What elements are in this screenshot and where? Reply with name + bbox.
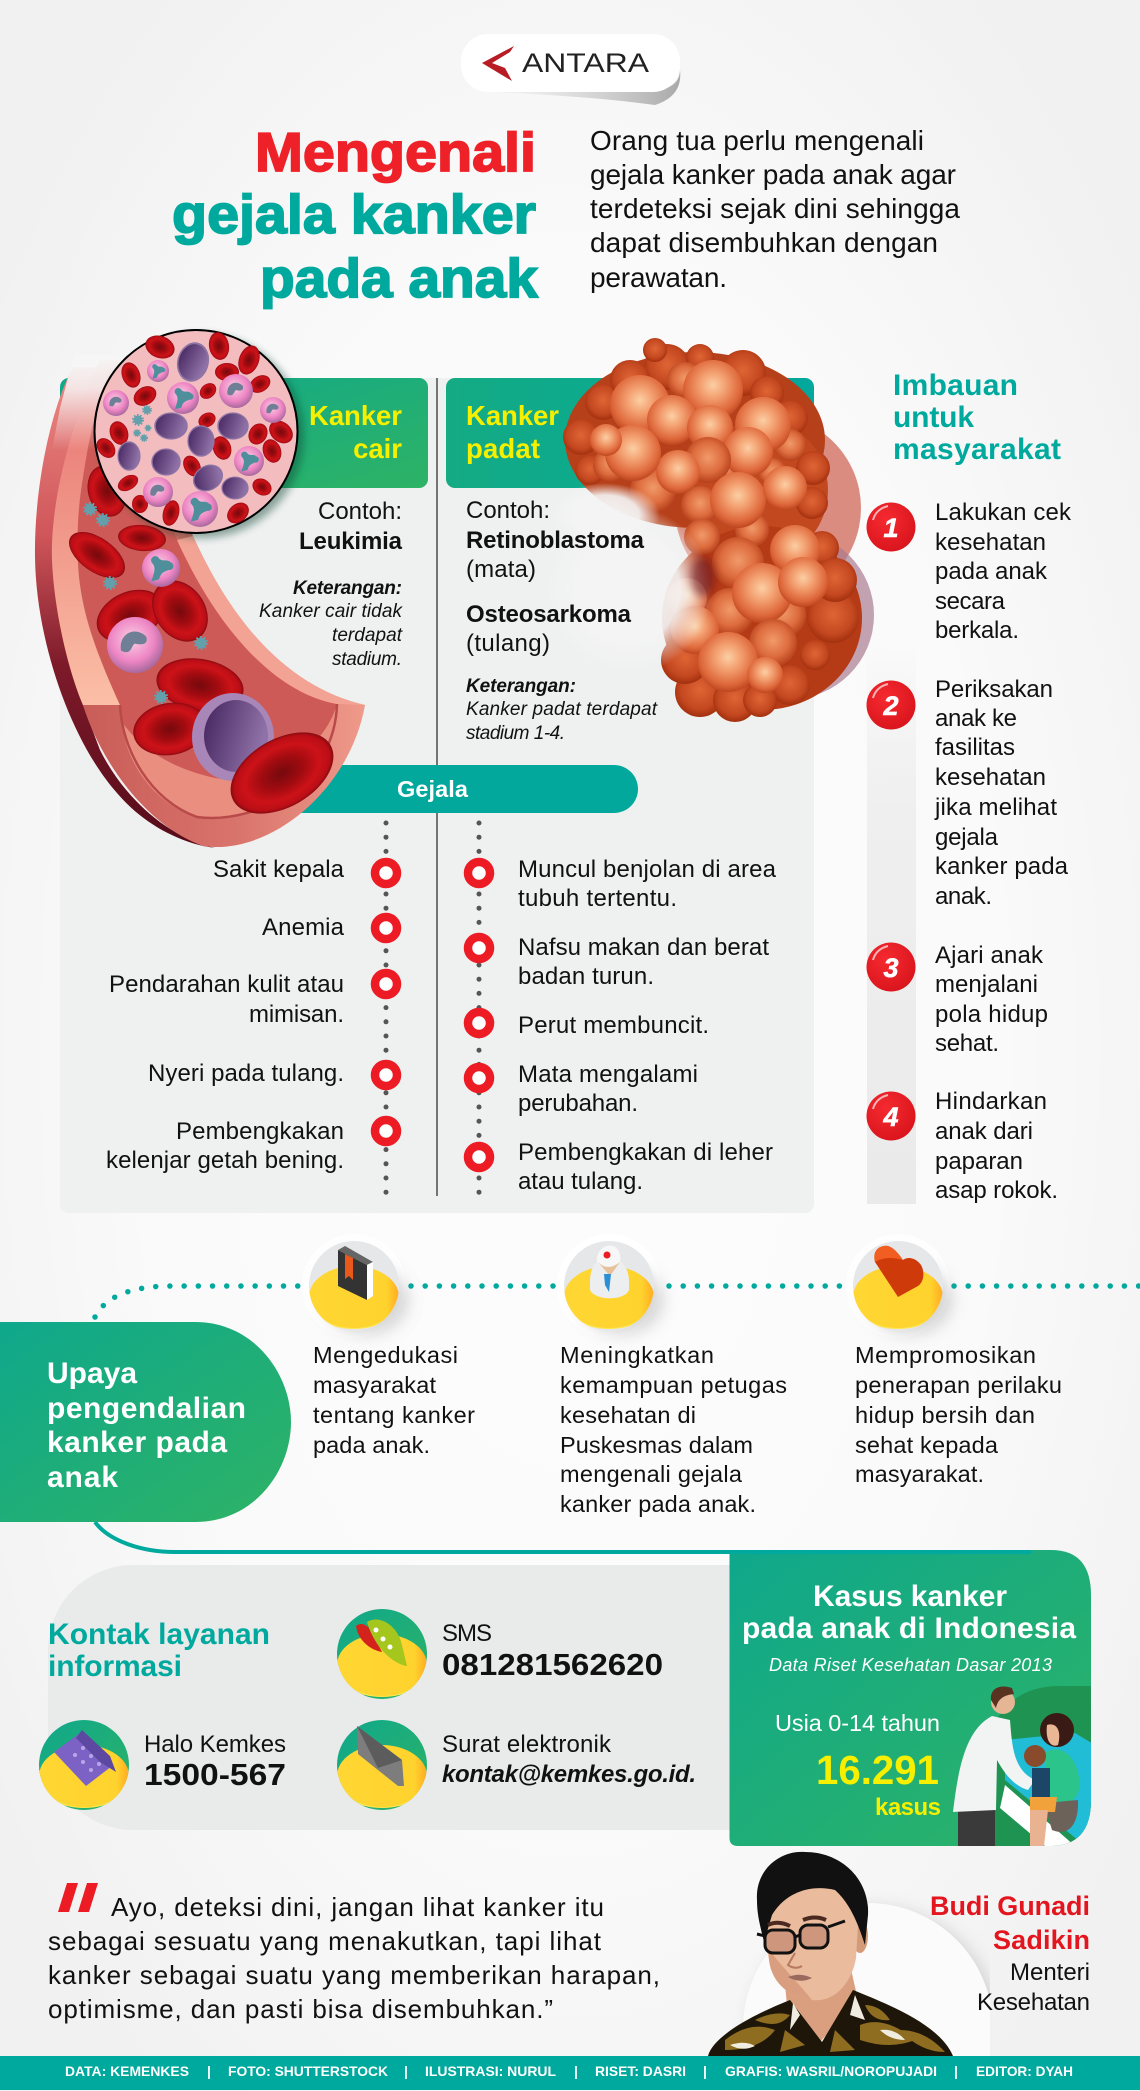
- illustration: blood vessel: [35, 355, 365, 848]
- kanker cair text: [259, 400, 404, 670]
- symptoms: kanker padat: tubuh tertentu.: [518, 885, 677, 912]
- intro text: Orang tua perlu mengenali: [590, 125, 924, 156]
- upaya 2 text: kanker pada anak.: [560, 1491, 756, 1517]
- upaya 2 text: kesehatan di: [560, 1402, 696, 1428]
- contact: halo kemkes: [39, 1720, 286, 1810]
- advice 1: berkala.: [935, 617, 1019, 644]
- upaya 3 text: [855, 1342, 1062, 1487]
- name: Budi Gunadi Sadikin: Sadikin: [993, 1925, 1090, 1955]
- panel: kontak background: [48, 1565, 740, 1830]
- contact: SMS: [337, 1609, 663, 1699]
- symptoms: kanker padat: Perut membuncit.: [518, 1012, 709, 1039]
- intro text: dapat disembuhkan dengan: [590, 227, 938, 258]
- name: Budi Gunadi Sadikin: Budi Gunadi: [930, 1891, 1090, 1921]
- panel: kasus kanker: 16.291: [816, 1747, 939, 1793]
- symptoms: kanker cair: Sakit kepala: [213, 856, 345, 883]
- footer credits: RISET: DASRI: [595, 2063, 686, 2079]
- illustration: doctor examining child: [953, 1686, 1095, 1846]
- kanker cair text: stadium.: [332, 649, 402, 670]
- quote: sebagai sesuatu yang menakutkan, tapi lihat: [48, 1926, 602, 1956]
- panel: kanker comparison background: [60, 378, 814, 1213]
- kanker padat text: Retinoblastoma: [466, 527, 645, 554]
- intro text: gejala kanker pada anak agar: [590, 159, 956, 190]
- advice 2: fasilitas: [935, 734, 1015, 761]
- quote: [48, 1883, 660, 2024]
- advice 2: kesehatan: [935, 764, 1046, 791]
- panel: kasus kanker: pada anak di Indonesia: [742, 1612, 1076, 1645]
- footer credits: |: [404, 2063, 408, 2079]
- advice 1: kesehatan: [935, 529, 1046, 556]
- footer credits: |: [703, 2063, 707, 2079]
- quote: kanker sebagai suatu yang memberikan harapan,: [48, 1960, 660, 1990]
- upaya 1 text: pada anak.: [313, 1432, 430, 1458]
- symptoms: kanker padat: Nafsu makan dan berat: [518, 934, 769, 961]
- heading: imbauan: masyarakat: [893, 433, 1061, 466]
- header: kanker cair background: [60, 378, 428, 488]
- title: gejala kanker: [172, 183, 536, 245]
- upaya 2 text: kemampuan petugas: [560, 1372, 787, 1398]
- panel: upaya pengendalian: anak: [47, 1461, 118, 1494]
- dotted symptom timelines: [386, 823, 479, 1194]
- upaya 3 text: Mempromosikan: [855, 1342, 1036, 1368]
- footer credits: GRAFIS: WASRIL/NOROPUJADI: [725, 2063, 937, 2079]
- advice 3: menjalani: [935, 971, 1038, 998]
- name: Budi Gunadi Sadikin: [930, 1891, 1090, 2016]
- contact: surat elektronik: kontak@kemkes.go.id.: [442, 1761, 696, 1788]
- panel: upaya pengendalian: kanker pada: [47, 1426, 227, 1459]
- advice 2: anak ke: [935, 705, 1017, 732]
- upaya 3 text: hidup bersih dan: [855, 1402, 1035, 1428]
- advice 3: 3: [883, 953, 899, 983]
- footer credits: |: [574, 2063, 578, 2079]
- title: [172, 121, 538, 309]
- connector line: [95, 1522, 1031, 1552]
- heading: imbauan: Imbauan: [893, 369, 1018, 402]
- advice 3: sehat.: [935, 1030, 999, 1057]
- panel: upaya pengendalian: [0, 1322, 291, 1522]
- panel: kasus kanker: [730, 1550, 1095, 1846]
- footer credits: |: [207, 2063, 211, 2079]
- symptoms: kanker padat: badan turun.: [518, 963, 654, 990]
- heading: kontak layanan informasi: [48, 1618, 270, 1683]
- symptoms: kanker cair: Pembengkakan: [176, 1118, 344, 1145]
- advice 4: Hindarkan: [935, 1088, 1047, 1115]
- symptoms: kanker padat: atau tulang.: [518, 1168, 643, 1195]
- advice 4: 4: [882, 1102, 899, 1132]
- logo: ANTARA: ANTARA: [522, 48, 649, 78]
- advice 1: secara: [935, 588, 1006, 615]
- gejala bar: [270, 765, 638, 813]
- kanker cair text: Kanker: [309, 400, 402, 431]
- advice 2: 2: [882, 691, 899, 721]
- upaya 2 text: Puskesmas dalam: [560, 1432, 753, 1458]
- header: kanker padat background: [446, 378, 814, 488]
- advice 1: Lakukan cek: [935, 499, 1072, 526]
- contact: halo kemkes: Halo Kemkes: [144, 1731, 286, 1758]
- advice 3: pola hidup: [935, 1001, 1048, 1028]
- symptoms: kanker cair: Nyeri pada tulang.: [148, 1060, 344, 1087]
- advice 2: [866, 676, 1069, 910]
- name: Budi Gunadi Sadikin: Menteri: [1010, 1959, 1090, 1986]
- upaya 1 text: Mengedukasi: [313, 1342, 458, 1368]
- footer credits: DATA: KEMENKES: [65, 2063, 189, 2079]
- heading: imbauan: [893, 369, 1061, 466]
- advice 4: anak dari: [935, 1118, 1033, 1145]
- contact: halo kemkes: 1500-567: [144, 1757, 286, 1792]
- name: Budi Gunadi Sadikin: Kesehatan: [977, 1989, 1090, 2016]
- kanker cair text: Leukimia: [299, 528, 403, 555]
- kanker cair text: Kanker cair tidak: [259, 601, 404, 622]
- kanker cair text: cair: [353, 433, 402, 464]
- footer credits: ILUSTRASI: NURUL: [425, 2063, 556, 2079]
- symptoms: kanker cair: Pendarahan kulit atau: [109, 971, 344, 998]
- kanker cair text: Contoh:: [318, 498, 402, 525]
- advice 4: paparan: [935, 1148, 1023, 1175]
- panel: kasus kanker: Kasus kanker: [813, 1580, 1007, 1613]
- upaya 2 text: Meningkatkan: [560, 1342, 714, 1368]
- symptoms: kanker padat: Pembengkakan di leher: [518, 1139, 773, 1166]
- advice 1: 1: [883, 513, 899, 543]
- panel: upaya pengendalian: Upaya: [47, 1357, 137, 1390]
- symptoms: kanker cair: mimisan.: [249, 1001, 344, 1028]
- symptoms: kanker cair: [106, 856, 397, 1174]
- upaya 3 text: penerapan perilaku: [855, 1372, 1062, 1398]
- illustration: magnified blood cells: [93, 330, 304, 538]
- intro text: perawatan.: [590, 262, 727, 293]
- panel: upaya pengendalian: pengendalian: [47, 1392, 246, 1425]
- advice 1: [866, 499, 1072, 644]
- panel: imbauan untuk masyarakat: [866, 369, 1072, 1204]
- advice 3: Ajari anak: [935, 942, 1044, 969]
- upaya 1 text: tentang kanker: [313, 1402, 475, 1428]
- advice 4: asap rokok.: [935, 1177, 1058, 1204]
- panel: kasus kanker: Data Riset Kesehatan Dasar 2013: [769, 1655, 1052, 1675]
- upaya 1 text: masyarakat: [313, 1372, 436, 1398]
- advice 2: gejala: [935, 824, 999, 851]
- divider between columns: [436, 378, 438, 1196]
- kanker padat text: Kanker padat terdapat: [466, 699, 658, 720]
- symptoms: kanker padat: Muncul benjolan di area: [518, 856, 777, 883]
- advice 3: [866, 942, 1048, 1057]
- footer credits: |: [954, 2063, 958, 2079]
- icon: health worker: [557, 1234, 663, 1338]
- heading: kontak layanan informasi: informasi: [48, 1650, 182, 1683]
- portrait: Budi Gunadi Sadikin: [708, 1852, 990, 2056]
- upaya 2 text: [560, 1342, 787, 1517]
- advice 4: [866, 1088, 1058, 1204]
- title: Mengenali: [255, 121, 536, 183]
- contact: SMS: 081281562620: [442, 1647, 663, 1682]
- contact: surat elektronik: [337, 1720, 696, 1810]
- contact: SMS: SMS: [442, 1620, 492, 1647]
- dotted connector: [95, 1286, 1140, 1317]
- gejala bar: Gejala: [397, 776, 469, 802]
- symptoms: kanker cair: Anemia: [262, 914, 345, 941]
- icon: book: [302, 1234, 408, 1338]
- icon: quotation mark: [58, 1883, 98, 1912]
- kanker padat text: stadium 1-4.: [466, 723, 565, 744]
- kanker padat text: padat: [466, 433, 540, 464]
- contact: surat elektronik: Surat elektronik: [442, 1731, 612, 1758]
- kanker padat text: Contoh:: [466, 497, 550, 524]
- advice 2: Periksakan: [935, 676, 1053, 703]
- logo: ANTARA: [461, 34, 680, 105]
- footer credits: [0, 2056, 1140, 2090]
- illustration: tumor: [544, 338, 874, 722]
- icon: heart: [846, 1234, 952, 1338]
- footer credits: FOTO: SHUTTERSTOCK: [228, 2063, 388, 2079]
- panel: kasus kanker: kasus: [875, 1794, 941, 1821]
- advice 1: pada anak: [935, 558, 1048, 585]
- quote: optimisme, dan pasti bisa disembuhkan.”: [48, 1994, 553, 2024]
- symptoms: kanker padat: [468, 856, 777, 1195]
- kanker padat text: Osteosarkoma: [466, 601, 632, 628]
- heading: kontak layanan informasi: Kontak layanan: [48, 1618, 270, 1651]
- kanker padat text: (mata): [466, 556, 536, 583]
- title: pada anak: [260, 247, 538, 309]
- upaya 2 text: mengenali gejala: [560, 1461, 743, 1487]
- panel: kasus kanker: Usia 0-14 tahun: [775, 1710, 940, 1736]
- symptoms: kanker padat: Mata mengalami: [518, 1061, 698, 1088]
- advice 2: jika melihat: [934, 794, 1057, 821]
- advice 2: kanker pada: [935, 853, 1069, 880]
- kanker padat text: [466, 400, 658, 744]
- symptoms: kanker cair: kelenjar getah bening.: [106, 1147, 344, 1174]
- upaya 3 text: masyarakat.: [855, 1461, 984, 1487]
- kanker padat text: (tulang): [466, 630, 550, 657]
- upaya 3 text: sehat kepada: [855, 1432, 999, 1458]
- kanker padat text: Kanker: [466, 400, 559, 431]
- kanker cair text: terdapat: [332, 625, 403, 646]
- heading: imbauan: untuk: [893, 401, 974, 434]
- footer credits: EDITOR: DYAH: [976, 2063, 1073, 2079]
- quote: Ayo, deteksi dini, jangan lihat kanker itu: [111, 1892, 604, 1922]
- intro text: terdeteksi sejak dini sehingga: [590, 193, 960, 224]
- intro text: [590, 125, 960, 293]
- symptoms: kanker padat: perubahan.: [518, 1090, 638, 1117]
- kanker padat text: Keterangan:: [466, 676, 576, 697]
- advice 2: anak.: [935, 883, 992, 910]
- kanker cair text: Keterangan:: [293, 578, 402, 599]
- upaya 1 text: [313, 1342, 475, 1458]
